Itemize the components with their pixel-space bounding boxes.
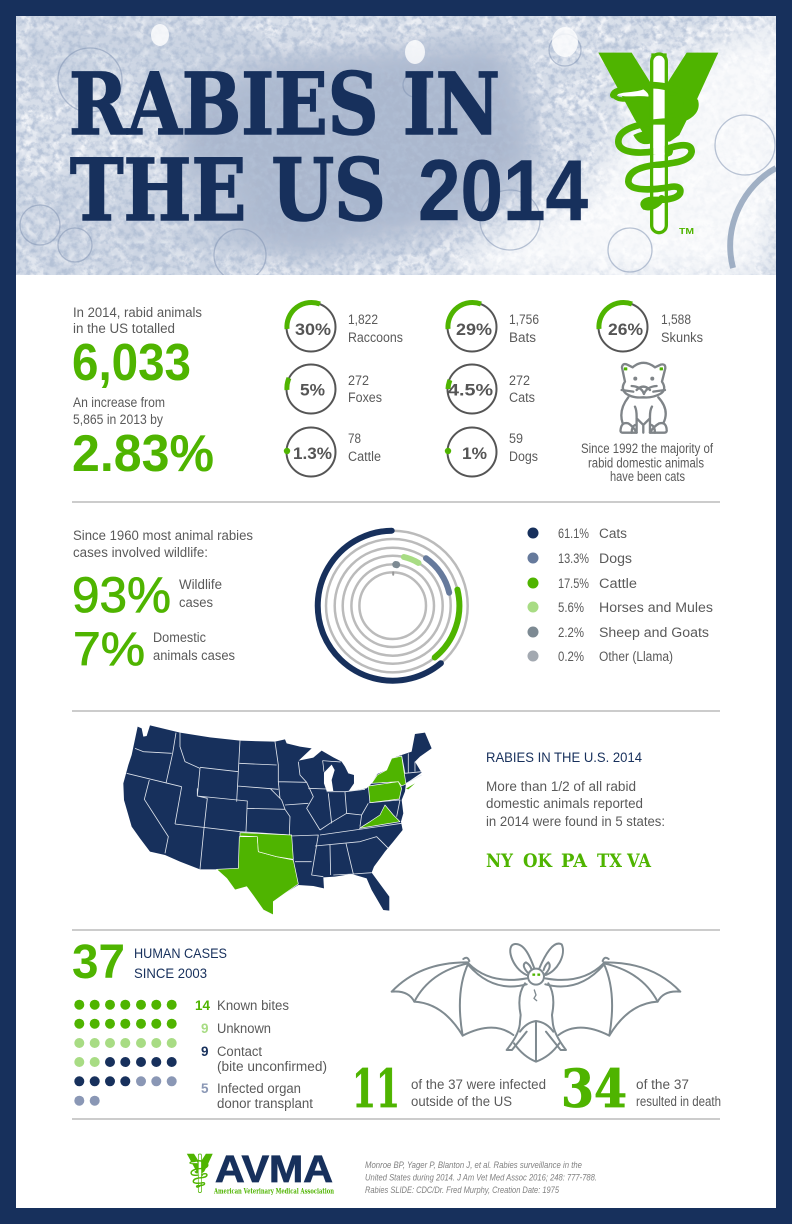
- text: cat caption: [581, 441, 713, 484]
- donut: cats: 272: [509, 373, 530, 388]
- text: increase: [73, 395, 165, 427]
- legend: case types: 9: [201, 1044, 209, 1059]
- donut: raccoons: 30%: [295, 321, 331, 339]
- legend: ring chart: 17.5%: [558, 576, 589, 591]
- legend: case types: [195, 998, 327, 1111]
- title: RABIES IN: [69, 55, 500, 155]
- stat: 11 infected outside US: of the 37 were infected: [411, 1077, 546, 1092]
- legend: ring chart: Cats: [599, 526, 627, 541]
- legend: case types: 9: [201, 1021, 209, 1036]
- icon: small staff logo: [187, 1154, 213, 1193]
- donut: foxes: 5%: [300, 382, 325, 400]
- legend: ring chart: Sheep and Goats: [599, 625, 709, 640]
- stat: 7% domestic: Domestic: [153, 630, 206, 645]
- text: totals intro: in the US totalled: [73, 321, 175, 336]
- donut: foxes: Foxes: [348, 390, 382, 405]
- legend: case types: 14: [195, 998, 210, 1013]
- donut: foxes: [286, 364, 382, 414]
- legend: ring chart: 5.6%: [558, 600, 584, 615]
- text: totals intro: In 2014, rabid animals: [73, 305, 202, 320]
- stat: 93% wildlife: cases: [179, 595, 213, 610]
- legend: ring chart: 0.2%: [558, 649, 584, 664]
- donut: foxes: 272: [348, 373, 369, 388]
- stat: 34 resulted in death: [561, 1059, 721, 1120]
- legend: ring chart: Cattle: [599, 576, 637, 591]
- Great Lakes: [324, 765, 335, 791]
- text: citations: United States during 2014. J Am Vet Med Assoc 2016; 248: 777-788.: [365, 1172, 597, 1184]
- title: 2014: [418, 143, 588, 239]
- heading: HUMAN CASES: [134, 945, 227, 961]
- state: Texas: [217, 837, 298, 915]
- donut: raccoons: [286, 302, 403, 352]
- state list: TX: [597, 850, 622, 872]
- text: domestic animals reported: [486, 796, 643, 811]
- header banner with micrograph texture: [16, 16, 790, 281]
- text: More than 1/2 of all rabid: [486, 779, 636, 794]
- text: wildlife intro: Since 1960 most animal rabies: [73, 528, 253, 543]
- text: citations: Monroe BP, Yager P, Blanton J, et al. Rabies surveillance in the: [365, 1160, 582, 1171]
- donut: cattle: Cattle: [348, 449, 381, 464]
- legend: case types: Known bites: [217, 998, 289, 1013]
- stat: 6,033: 6,033: [72, 334, 191, 392]
- stat: 93% wildlife: [72, 567, 222, 623]
- donut: dogs: 1%: [462, 445, 487, 463]
- stat: 7% domestic: 7%: [73, 622, 145, 675]
- association name: American Veterinary Medical Association: [213, 1186, 334, 1196]
- heading: RABIES IN THE U.S. 2014: [486, 750, 642, 765]
- panel: human cases: [72, 936, 327, 1111]
- stat: 37: 37: [72, 936, 125, 989]
- legend: case types: Unknown: [217, 1021, 271, 1036]
- footer: AVMA logo: [187, 1149, 334, 1196]
- text: cat caption: have been cats: [610, 469, 685, 484]
- chart: concentric rings: [318, 531, 468, 681]
- state list: VA: [626, 850, 651, 872]
- state list: NY: [486, 850, 513, 872]
- panel: species donuts: [284, 302, 703, 476]
- donut: skunks: Skunks: [661, 330, 703, 345]
- donut: skunks: 1,588: [661, 312, 691, 327]
- donut: raccoons: 1,822: [348, 312, 378, 327]
- donut: cats: [448, 364, 535, 414]
- legend: ring chart: Dogs: [599, 551, 632, 566]
- heading: SINCE 2003: [134, 965, 207, 981]
- text: cat caption: rabid domestic animals: [588, 456, 704, 470]
- state list: PA: [561, 850, 587, 872]
- legend: case types: donor transplant: [217, 1096, 313, 1111]
- state: New York: [372, 756, 406, 786]
- title: [69, 55, 588, 241]
- donut: cats: Cats: [509, 390, 535, 405]
- legend: ring chart: [528, 526, 713, 664]
- donut: skunks: [598, 302, 703, 352]
- text: wildlife intro: cases involved wildlife:: [73, 545, 208, 560]
- donut: dogs: 59: [509, 431, 523, 446]
- donut: dogs: Dogs: [509, 449, 538, 464]
- stat: 93% wildlife: Wildlife: [179, 577, 222, 592]
- icon: staff of Aesculapius logo: [598, 53, 718, 233]
- dot grid: [74, 1000, 177, 1106]
- donut: bats: 29%: [456, 321, 492, 339]
- state list: OK: [523, 850, 553, 872]
- legend: case types: (bite unconfirmed): [217, 1059, 327, 1074]
- panel: rabid animal totals: [72, 305, 214, 483]
- stat: 34 resulted in death: 34: [561, 1059, 627, 1120]
- donut: bats: 1,756: [509, 312, 539, 327]
- stat: 11 infected outside US: outside of the US: [411, 1094, 512, 1109]
- icon: bat: [392, 944, 680, 1062]
- panel: rabies in the US text: [486, 750, 665, 872]
- text: totals intro: [73, 305, 202, 336]
- donut: cats: 4.5%: [448, 382, 493, 400]
- panel: wildlife share: [72, 528, 253, 675]
- state: Virginia: [359, 805, 400, 828]
- legend: ring chart: Horses and Mules: [599, 600, 713, 615]
- heading: [134, 945, 227, 981]
- stat: 34 resulted in death: of the 37: [636, 1077, 689, 1092]
- donut: skunks: 26%: [608, 321, 643, 339]
- donut: bats: Bats: [509, 330, 536, 345]
- state: Pennsylvania: [368, 782, 402, 803]
- legend: ring chart: 2.2%: [558, 625, 584, 640]
- trademark mark: TM: [679, 227, 694, 236]
- text: citations: Rabies SLIDE: CDC/Dr. Fred Murphy, Creation Date: 1975: [365, 1185, 560, 1196]
- stat: 7% domestic: [73, 622, 235, 675]
- wordmark: AVMA: [215, 1149, 333, 1191]
- text: wildlife intro: [73, 528, 253, 560]
- legend: ring chart: 61.1%: [558, 526, 589, 541]
- stat: 7% domestic: animals cases: [153, 648, 235, 663]
- stat: 93% wildlife: 93%: [72, 567, 171, 623]
- text: [486, 779, 665, 829]
- text: increase: An increase from: [73, 395, 165, 410]
- legend: ring chart: Other (Llama): [599, 649, 673, 664]
- state: Oklahoma: [240, 833, 293, 859]
- text: increase: 5,865 in 2013 by: [73, 412, 163, 427]
- state list: [486, 850, 651, 872]
- donut: bats: [448, 302, 539, 352]
- donut: cattle: 78: [348, 431, 361, 446]
- text: in 2014 were found in 5 states:: [486, 814, 665, 829]
- stat: 11 infected outside US: [352, 1059, 546, 1120]
- donut: cattle: [284, 428, 381, 476]
- legend: ring chart: 13.3%: [558, 551, 589, 566]
- map: United States: [123, 725, 432, 915]
- icon: cat: [620, 363, 667, 433]
- text: cat caption: Since 1992 the majority of: [581, 441, 713, 456]
- legend: case types: 5: [201, 1081, 209, 1096]
- legend: case types: Contact: [217, 1044, 262, 1059]
- donut: dogs: [445, 428, 538, 476]
- donut: raccoons: Raccoons: [348, 330, 403, 345]
- stat: 11 infected outside US: 11: [352, 1059, 400, 1120]
- stat: 34 resulted in death: resulted in death: [636, 1094, 721, 1109]
- title: THE US: [70, 141, 386, 241]
- text: citations: [365, 1160, 597, 1196]
- donut: cattle: 1.3%: [293, 445, 332, 463]
- legend: case types: Infected organ: [217, 1081, 301, 1096]
- stat: 2.83%: 2.83%: [72, 425, 214, 483]
